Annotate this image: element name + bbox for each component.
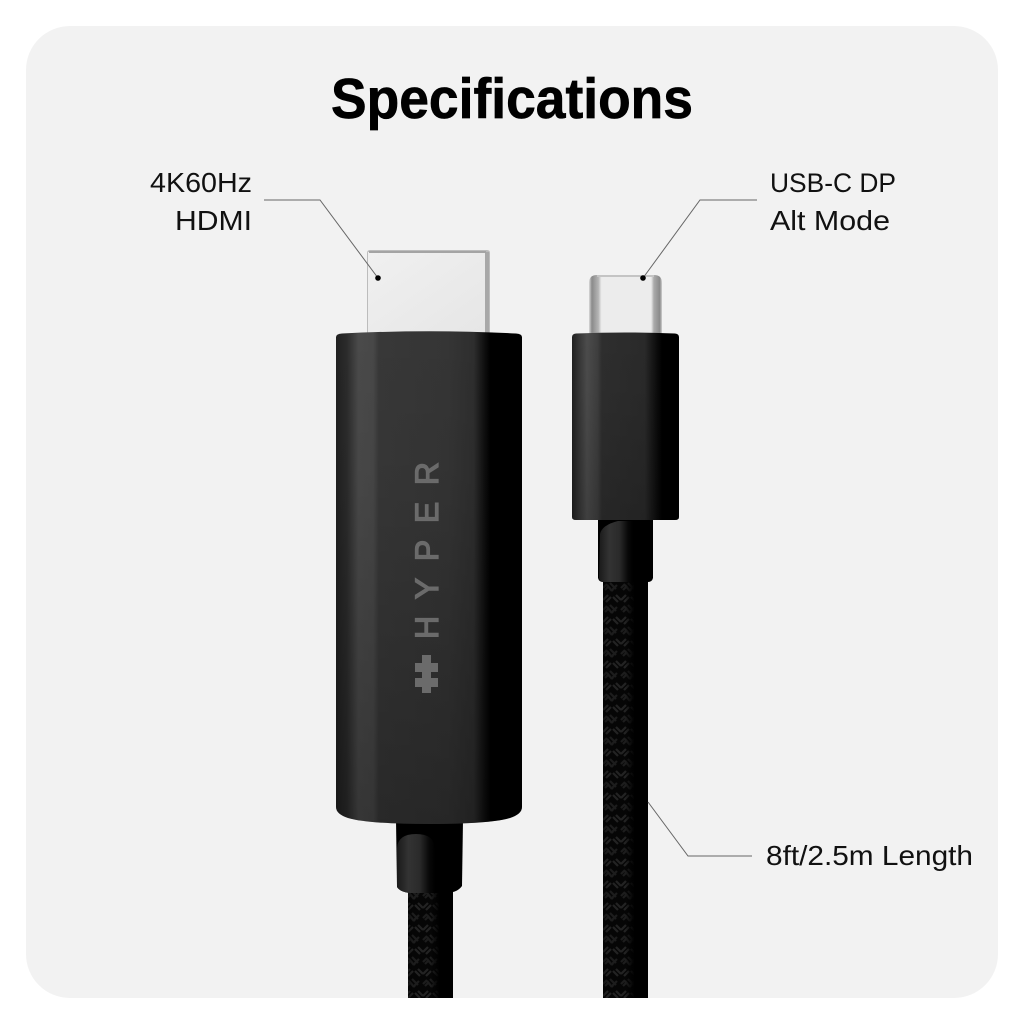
leader line	[640, 200, 757, 281]
callout: cable length	[648, 802, 973, 871]
HDMI cable assembly	[336, 250, 522, 998]
HYPER logotype	[409, 462, 445, 693]
callout: 4K60Hz HDMI	[150, 167, 381, 281]
label text: USB-C DP	[770, 168, 896, 198]
title: Specifications	[331, 67, 693, 131]
icon: Hyper logo mark	[415, 655, 438, 693]
HDMI braided cable	[408, 890, 453, 998]
label text	[770, 168, 896, 236]
callout: USB-C DP Alt Mode	[640, 168, 896, 281]
HDMI metal plug	[367, 250, 490, 333]
USB-C braided cable	[603, 578, 648, 998]
leader line	[648, 802, 752, 856]
label text: HDMI	[175, 205, 252, 236]
label text	[150, 167, 252, 236]
leader line	[264, 200, 381, 281]
USB-C connector housing	[572, 332, 679, 520]
label text: Alt Mode	[770, 205, 890, 236]
label text: 4K60Hz	[150, 167, 252, 198]
label text: 8ft/2.5m Length	[766, 840, 973, 871]
USB-C cable assembly	[572, 275, 679, 998]
USB-C metal plug	[589, 275, 662, 335]
HDMI strain relief	[396, 820, 463, 893]
HDMI connector housing	[336, 331, 522, 824]
USB-C strain relief	[598, 518, 653, 582]
brand name: HYPER	[409, 462, 445, 639]
